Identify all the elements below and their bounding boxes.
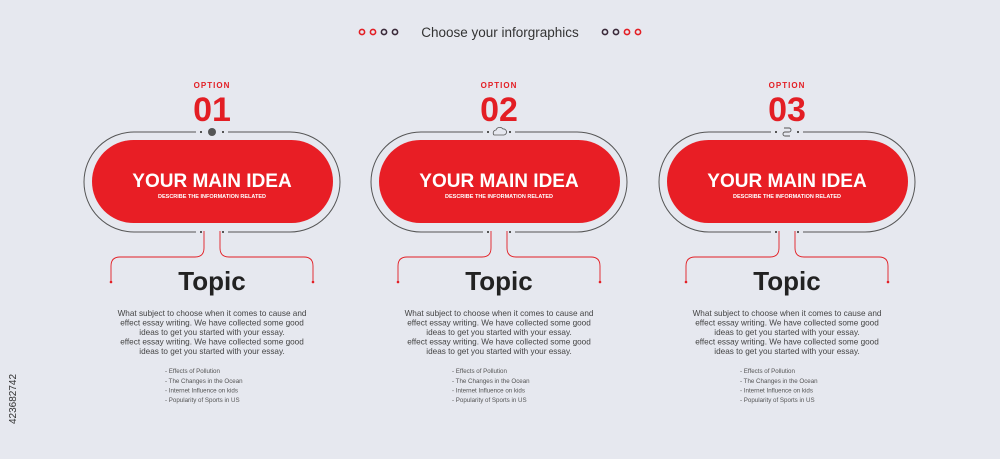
side watermark id: 423682742 — [8, 374, 19, 424]
body text: effect essay writing. We have collected some good — [695, 318, 879, 328]
list: - Effects of Pollution — [452, 368, 507, 375]
number: 03 — [768, 91, 806, 129]
panel: option 03: DESCRIBE THE INFORMATION RELATED — [733, 194, 841, 200]
main idea: YOUR MAIN IDEA — [707, 171, 867, 192]
body text — [693, 309, 882, 356]
list: - The Changes in the Ocean — [740, 378, 818, 385]
list: - Internet Influence on kids — [740, 388, 813, 394]
body text: effect essay writing. We have collected some good — [407, 318, 591, 328]
body text: ideas to get you started with your essay. — [139, 347, 285, 356]
topic: Topic — [465, 266, 533, 296]
header title: Choose your inforgraphics — [421, 25, 579, 40]
icon: cloud — [493, 127, 507, 135]
body text: ideas to get you started with your essay. — [139, 328, 285, 337]
dots left — [359, 29, 398, 35]
panel: option 02: DESCRIBE THE INFORMATION RELATED — [445, 194, 553, 200]
red pill — [379, 140, 620, 223]
red pill — [667, 140, 908, 223]
main idea: YOUR MAIN IDEA — [132, 171, 292, 192]
list: - The Changes in the Ocean — [452, 378, 530, 385]
body text: ideas to get you started with your essay. — [426, 347, 572, 356]
list — [452, 368, 530, 404]
list: - Popularity of Sports in US — [740, 397, 815, 404]
outline capsule — [84, 132, 340, 232]
header — [359, 25, 641, 40]
body text — [405, 309, 594, 356]
connectors — [111, 231, 313, 282]
body text — [118, 309, 307, 356]
panel: option 01 — [84, 81, 340, 404]
topic: Topic — [178, 266, 246, 296]
connectors — [686, 231, 888, 282]
number: 02 — [480, 91, 518, 129]
body text: effect essay writing. We have collected some good — [120, 338, 304, 346]
panel: option 01: DESCRIBE THE INFORMATION RELATED — [158, 194, 266, 200]
list: - Internet Influence on kids — [452, 388, 525, 394]
list: - The Changes in the Ocean — [165, 378, 243, 385]
red pill — [92, 140, 333, 223]
panel: option 02 — [371, 81, 627, 404]
list — [165, 368, 243, 404]
body text: ideas to get you started with your essay. — [426, 328, 572, 337]
dots right — [602, 29, 641, 35]
body text: ideas to get you started with your essay. — [714, 347, 860, 356]
outline capsule — [659, 132, 915, 232]
option label: OPTION — [194, 81, 230, 90]
body text: ideas to get you started with your essay. — [714, 328, 860, 337]
body text: effect essay writing. We have collected some good — [120, 318, 304, 328]
option label: OPTION — [769, 81, 805, 90]
panel: option 03 — [659, 81, 915, 404]
body text: effect essay writing. We have collected some good — [695, 338, 879, 346]
icon: route — [783, 128, 791, 136]
body text: effect essay writing. We have collected some good — [407, 338, 591, 346]
list: - Popularity of Sports in US — [452, 397, 527, 404]
list: - Effects of Pollution — [165, 368, 220, 375]
list: - Effects of Pollution — [740, 368, 795, 375]
body text: What subject to choose when it comes to cause and — [118, 309, 307, 318]
main idea: YOUR MAIN IDEA — [419, 171, 579, 192]
body text: What subject to choose when it comes to cause and — [405, 309, 594, 318]
list: - Internet Influence on kids — [165, 388, 238, 394]
topic: Topic — [753, 266, 821, 296]
connectors — [398, 231, 600, 282]
icon: globe — [208, 128, 216, 136]
number: 01 — [193, 91, 231, 129]
list — [740, 368, 818, 404]
list: - Popularity of Sports in US — [165, 397, 240, 404]
outline capsule — [371, 132, 627, 232]
body text: What subject to choose when it comes to cause and — [693, 309, 882, 318]
option label: OPTION — [481, 81, 517, 90]
